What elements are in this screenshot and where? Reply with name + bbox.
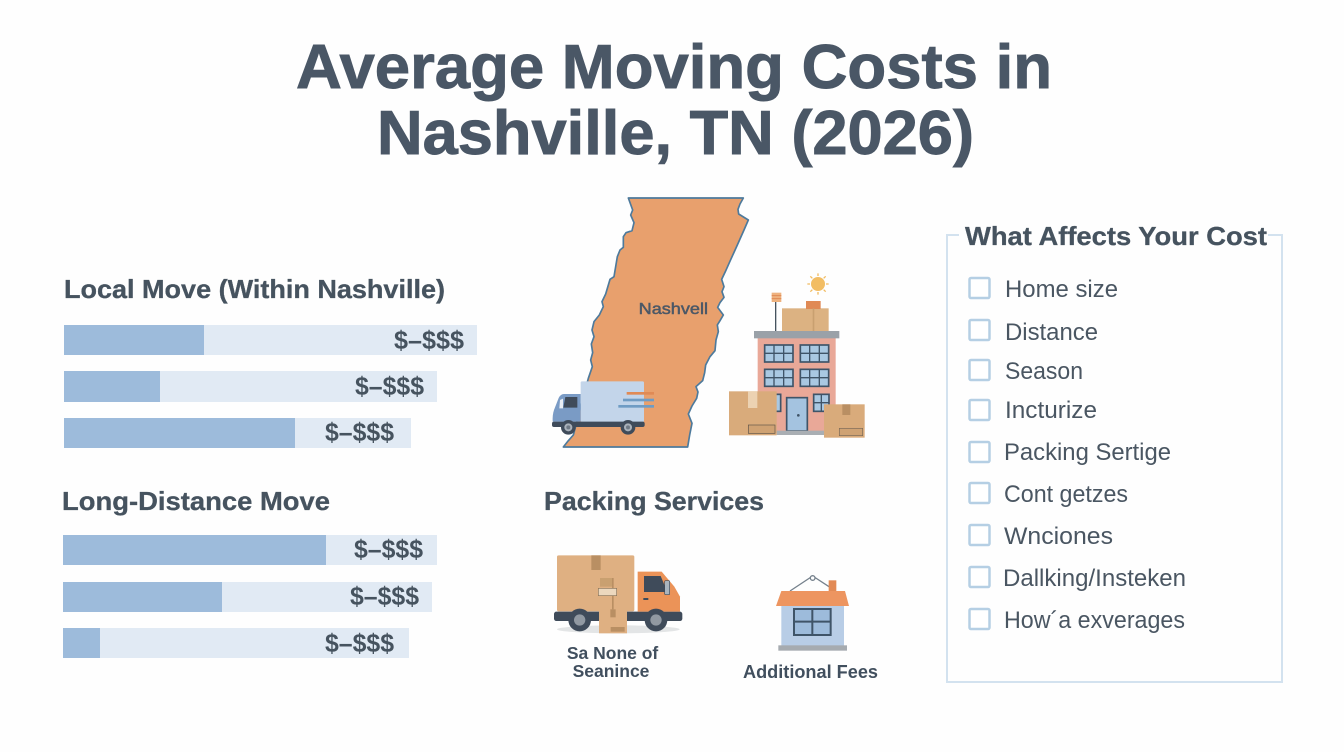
checklist item: dallking/insteken: Dallking/Insteken [1003, 565, 1186, 592]
bar: long distance 2 [63, 581, 432, 612]
bar: long distance 1 [63, 534, 437, 565]
caption: truck: Sa None of [567, 643, 658, 663]
heading: local move: Local Move (Within Nashville) [64, 274, 445, 304]
map label: Nashvell [639, 301, 708, 318]
icon: delivery truck with boxes [554, 555, 682, 633]
bar: local move 3 [64, 417, 411, 448]
panel: long-distance move [62, 486, 437, 658]
panel border [947, 235, 1282, 682]
title: Average Moving Costs in [296, 33, 1052, 102]
icon: apartment building with boxes [729, 273, 865, 438]
bar: long distance 1: $–$$$ [354, 534, 424, 564]
checklist item: how'a exverages: How´a exverages [1004, 607, 1185, 634]
bar: local move 3: $–$$$ [325, 417, 395, 447]
bar: local move 2: $–$$$ [355, 371, 425, 401]
heading: what affects your cost: What Affects Your Cost [965, 221, 1267, 251]
caption: additional fees: Additional Fees [743, 662, 878, 682]
title [296, 33, 1052, 168]
checklist item: home size: Home size [1005, 276, 1118, 303]
bar: local move 1: $–$$$ [394, 325, 465, 355]
map illustration: Tennessee map with truck [552, 198, 865, 447]
panel: local move [64, 274, 477, 448]
icon: small house [776, 576, 849, 651]
map shape [563, 198, 748, 447]
checklist item: season [970, 358, 1083, 385]
checklist item: incturize: Incturize [1005, 397, 1097, 424]
heading: packing services: Packing Services [544, 486, 764, 516]
bar: long distance 2: $–$$$ [350, 581, 420, 611]
checklist item: distance: Distance [1005, 319, 1098, 346]
bar: local move 1 [64, 325, 477, 355]
checklist item: wnciones: Wnciones [1004, 523, 1113, 550]
heading: long-distance move: Long-Distance Move [62, 486, 330, 516]
checklist item: packing sertige: Packing Sertige [1004, 439, 1171, 466]
icon: moving truck [552, 381, 654, 435]
checklist item: season: Season [1005, 358, 1083, 385]
title: Nashville, TN (2026) [377, 99, 974, 168]
bar: local move 2 [64, 371, 437, 402]
panel: what affects your cost [947, 221, 1282, 682]
bar: long distance 3 [63, 628, 409, 658]
caption: truck: Seanince [573, 661, 650, 681]
bar: long distance 3: $–$$$ [325, 628, 395, 658]
packing illustrations [554, 555, 849, 651]
checklist item: cont getzes: Cont getzes [1004, 481, 1128, 508]
